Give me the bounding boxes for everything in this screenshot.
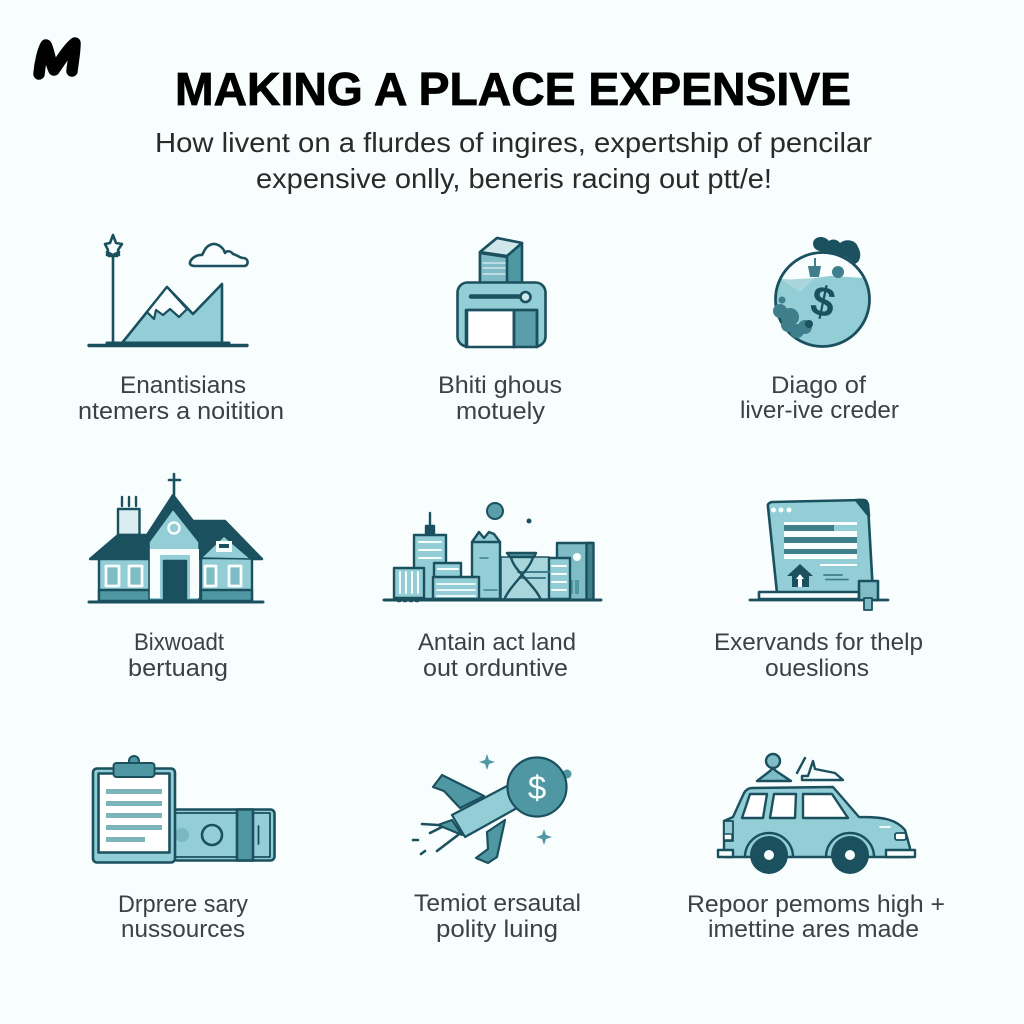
icon: car with roof items — [718, 754, 915, 874]
label: out orduntive — [423, 655, 568, 682]
icon: plane and dollar coin: $ — [528, 769, 546, 806]
subtitle — [155, 127, 872, 194]
icon: house — [89, 474, 263, 602]
label: Drprere sary — [118, 891, 248, 918]
title: MAKING A PLACE EXPENSIVE — [175, 63, 851, 115]
label: Temiot ersautal — [414, 890, 581, 917]
label — [128, 629, 228, 682]
label — [118, 891, 248, 943]
label — [438, 372, 562, 425]
panel: money globe — [740, 237, 899, 424]
icon: clipboard and wallet — [93, 756, 274, 862]
panel: plane with coin — [413, 754, 581, 943]
icon: mountain scene — [89, 235, 248, 346]
label — [414, 890, 581, 943]
icon: globe with dollar — [773, 237, 870, 346]
subtitle: expensive onlly, beneris racing out ptt/e! — [256, 163, 772, 194]
icon: printer with box — [458, 238, 546, 347]
label: Bhiti ghous — [438, 372, 562, 399]
label: Enantisians — [120, 372, 246, 399]
label: motuely — [456, 398, 545, 425]
panel: mountain and lamp — [78, 235, 284, 425]
label: Diago of — [771, 372, 866, 399]
icon: plane and dollar coin — [413, 754, 572, 863]
label: nussources — [121, 916, 245, 943]
label: ntemers a noitition — [78, 398, 284, 425]
subtitle: How livent on a flurdes of ingires, expertship of pencilar — [155, 127, 872, 158]
label — [714, 629, 923, 682]
label: Bixwoadt — [134, 629, 224, 656]
panel: printer — [438, 238, 562, 425]
logo: M mark — [39, 43, 75, 74]
icon: city — [384, 503, 601, 601]
icon: globe with dollar: $ — [807, 276, 839, 327]
label: Antain act land — [418, 629, 576, 656]
label: ouesl​ions — [765, 655, 869, 682]
label: liver-ive creder — [740, 397, 899, 424]
label — [418, 629, 576, 682]
label: Repoor pemoms high + — [687, 891, 945, 918]
label — [687, 891, 945, 943]
icon: browser with house — [750, 500, 888, 610]
label: bertuang — [128, 655, 228, 682]
label: polity luing — [436, 916, 558, 943]
label — [78, 372, 284, 425]
panel: city skyline — [384, 503, 601, 682]
label — [740, 372, 899, 424]
panel: browser window — [714, 500, 923, 682]
panel: house with cross — [89, 474, 263, 682]
panel: clipboard and wallet — [93, 756, 274, 943]
label: Exervands for thelp — [714, 629, 923, 656]
panel: car — [687, 754, 945, 943]
label: imettine ares made — [708, 916, 919, 943]
